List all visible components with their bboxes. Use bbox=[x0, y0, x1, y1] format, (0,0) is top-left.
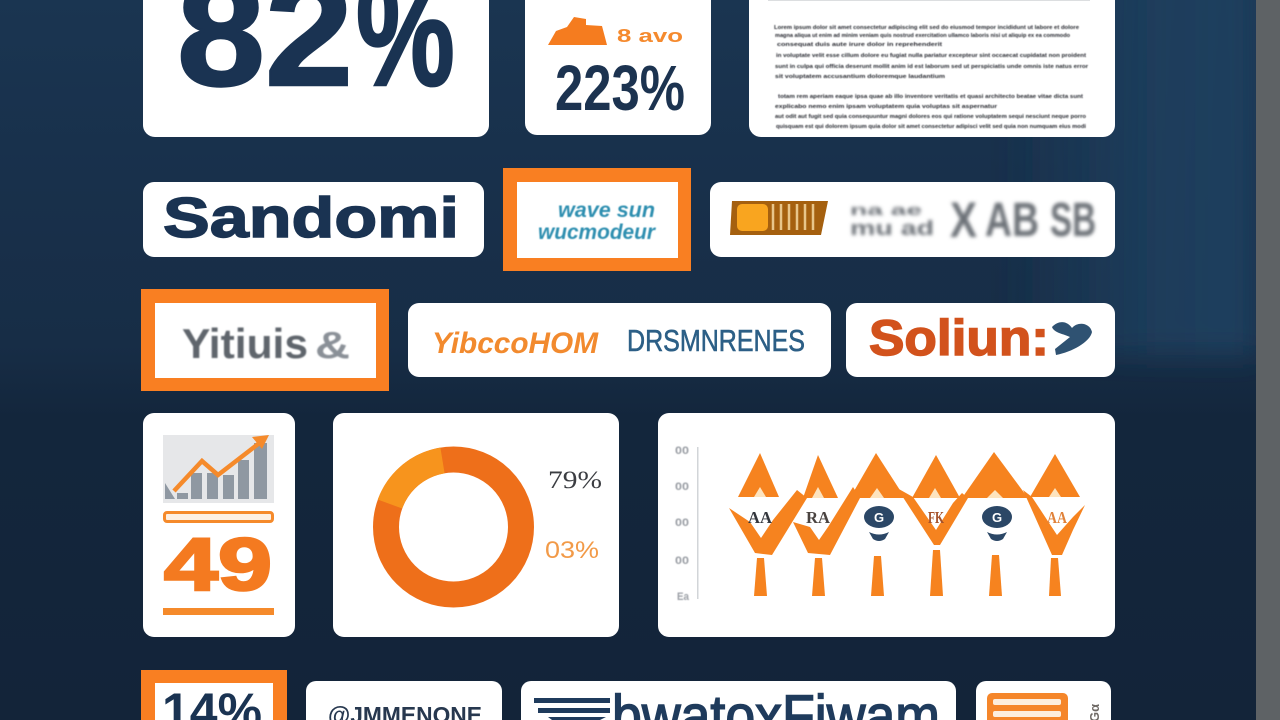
label: avo: 8 avo bbox=[617, 26, 683, 46]
body paragraphs: in voluptate velit esse cillum dolore eu fugiat nulla pariatur excepteur sint occaecat cupidatat non proident bbox=[776, 53, 1086, 59]
panel: zigzag chart bbox=[658, 413, 1115, 637]
panel: 223% stat bbox=[525, 0, 711, 135]
body paragraphs: aut odit aut fugit sed quia consequuntur magni dolores eos qui ratione voluptatem sequi nesciunt neque porro bbox=[775, 114, 1087, 120]
small labels: RA bbox=[806, 508, 831, 527]
orange zigzag shapes bbox=[729, 452, 1085, 596]
panel: badge and blurred labels bbox=[710, 182, 1115, 257]
body paragraphs bbox=[774, 25, 1089, 130]
gray glyph: & bbox=[315, 325, 350, 367]
y axis: 00 bbox=[675, 555, 689, 567]
y axis: 00 bbox=[675, 445, 689, 457]
wordmark: Soliun: bbox=[869, 310, 1049, 366]
gray text: Yitiuis bbox=[182, 320, 308, 367]
logo text: Sandomi: Sandomi bbox=[163, 186, 459, 250]
small labels: FK bbox=[928, 508, 945, 527]
circle labels: G bbox=[874, 510, 884, 525]
panel: large wordmark bbox=[521, 681, 956, 720]
panel: growth stat bbox=[143, 413, 295, 637]
body paragraphs: explicabo nemo enim ipsam voluptatem quia voluptas sit aspernatur bbox=[775, 104, 998, 110]
spikes bbox=[754, 558, 767, 596]
teal text: wave sun bbox=[558, 199, 655, 222]
icons: dark circles bbox=[864, 506, 1012, 541]
blurred labels: na ae bbox=[850, 202, 922, 219]
panel: 82% stat bbox=[143, 0, 489, 137]
body paragraphs: sit voluptatem accusantium doloremque laudantium bbox=[775, 74, 945, 80]
value: 03%: 03% bbox=[545, 537, 599, 564]
y axis bbox=[675, 445, 698, 603]
outlined bar bbox=[164, 512, 272, 522]
right edge strip bbox=[1256, 0, 1280, 720]
orange wordmark: YibccoHOM bbox=[432, 327, 599, 360]
stat: 223%: 223% bbox=[555, 52, 685, 124]
panel: Solium bbox=[846, 303, 1115, 377]
panel: orange framed 14% bbox=[141, 670, 287, 720]
y axis: 00 bbox=[675, 481, 689, 493]
blurred labels: AB bbox=[985, 194, 1039, 247]
icon: heart bbox=[1052, 322, 1092, 355]
donut bbox=[386, 460, 521, 594]
body paragraphs: sunt in culpa qui officia deserunt mollit anim id est laborum sed ut perspiciatis unde omnis iste natus error bbox=[775, 64, 1089, 70]
underline bbox=[163, 608, 274, 615]
y axis: 00 bbox=[675, 517, 689, 529]
blue wordmark: DRSMNRENES bbox=[627, 323, 805, 358]
stacked bars bbox=[987, 693, 1068, 720]
small labels bbox=[748, 508, 1068, 527]
triangle notches bbox=[754, 487, 1061, 498]
circle labels: G bbox=[992, 510, 1002, 525]
blurred labels: X bbox=[950, 192, 977, 248]
blurred labels: SB bbox=[1050, 194, 1096, 247]
body paragraphs: Lorem ipsum dolor sit amet consectetur adipiscing elit sed do eiusmod tempor incididunt ut labore et dolore bbox=[774, 25, 1079, 31]
blurred labels: mu ad bbox=[850, 218, 934, 240]
panel: orange framed Yitius bbox=[141, 289, 389, 391]
y axis: Ea bbox=[677, 591, 690, 603]
body paragraphs: magna aliqua ut enim ad minim veniam quis nostrud exercitation ullamco laboris nisi ut aliquip ex ea commodo bbox=[775, 33, 1071, 39]
body paragraphs: totam rem aperiam eaque ipsa quae ab illo inventore veritatis et quasi architecto beatae vitae dicta sunt bbox=[778, 94, 1083, 100]
panel: orange framed note bbox=[503, 168, 691, 271]
small labels: AA bbox=[1047, 508, 1068, 527]
panel: Sandomi bbox=[143, 182, 484, 257]
icon: stacked lines bbox=[534, 698, 610, 720]
small labels: AA bbox=[748, 508, 773, 527]
teal text bbox=[538, 199, 657, 244]
panel: donut chart bbox=[333, 413, 619, 637]
panel: two-tone wordmark bbox=[408, 303, 831, 377]
circle labels bbox=[874, 510, 1002, 525]
stat: 49: 49 bbox=[164, 523, 272, 606]
badge bbox=[730, 201, 828, 235]
body paragraphs: quisquam est qui dolorem ipsum quia dolor sit amet consectetur adipisci velit sed quia non numquam eius modi bbox=[776, 124, 1086, 130]
value: 79%: 79% bbox=[548, 467, 602, 494]
panel: text block bbox=[749, 0, 1115, 137]
icon: growth chart bbox=[163, 435, 274, 503]
panel: orange bars bbox=[976, 681, 1111, 720]
icon: orange shape bbox=[548, 17, 607, 45]
body paragraphs: consequat duis aute irure dolor in reprehenderit bbox=[777, 42, 942, 48]
teal text: wucmodeur bbox=[538, 221, 657, 244]
panel: small wordmark bbox=[306, 681, 502, 720]
blurred labels bbox=[850, 192, 1096, 248]
